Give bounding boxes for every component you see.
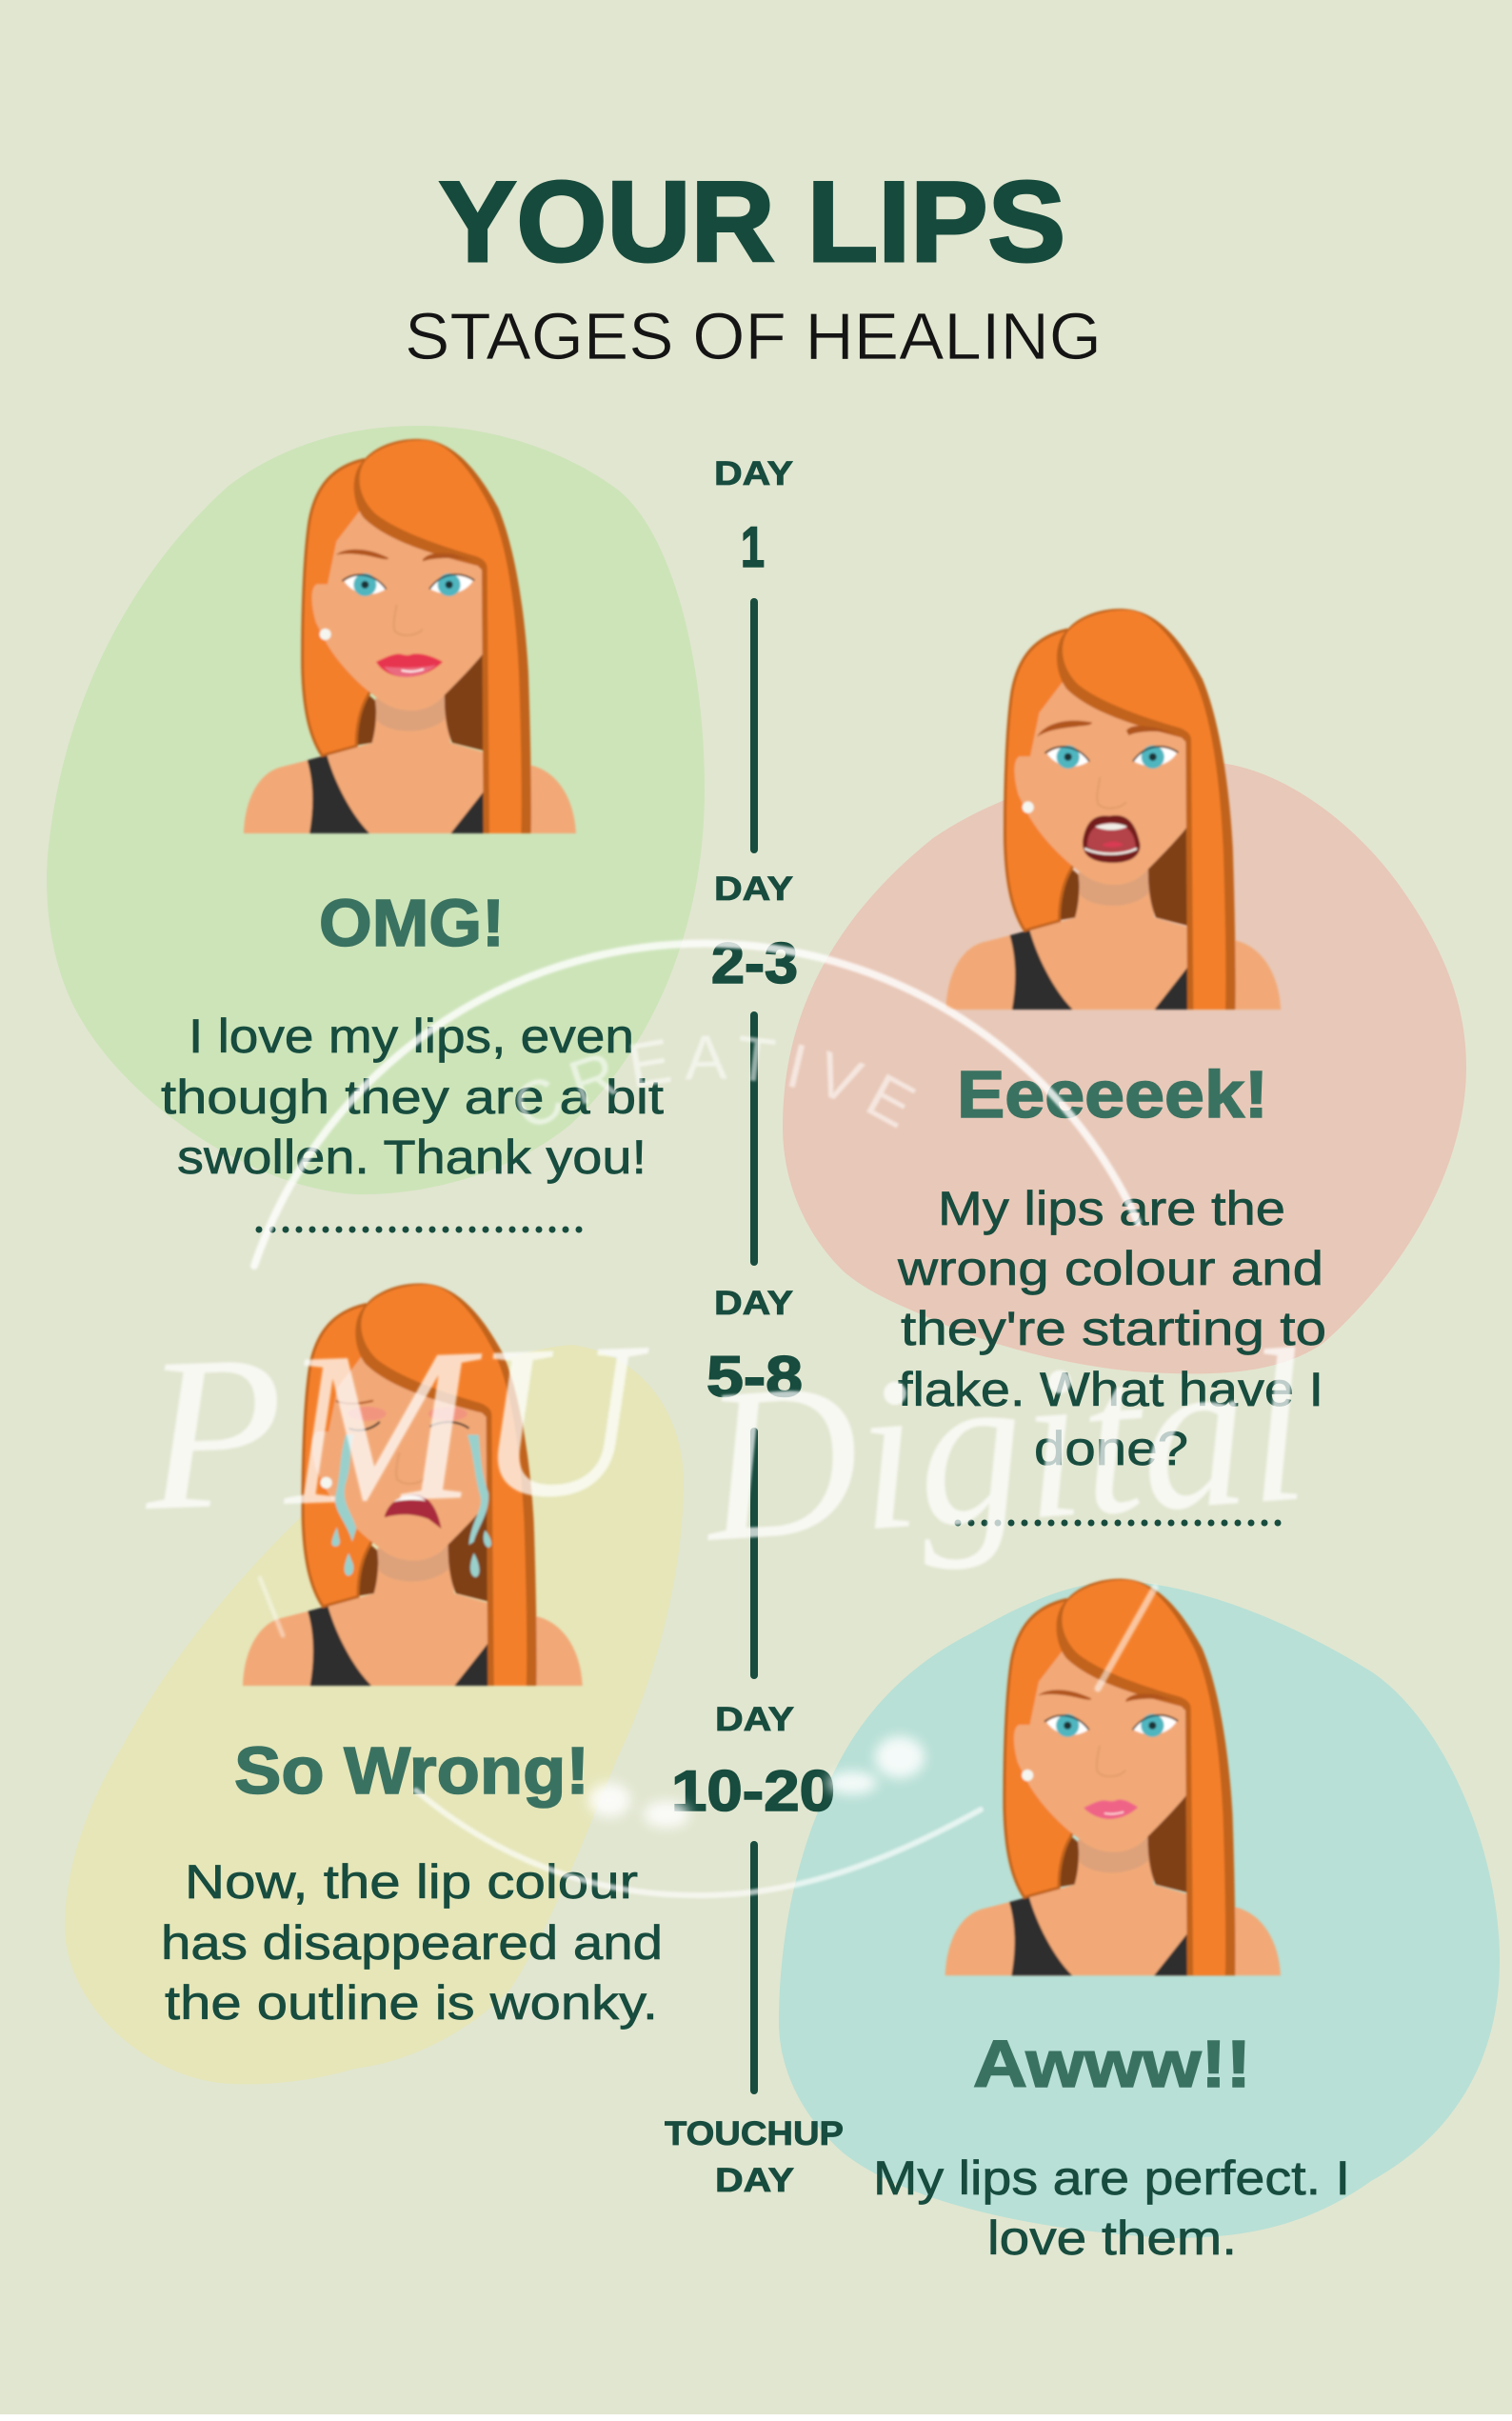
- blob: yellow: [65, 1345, 684, 2084]
- text block: Eeeeeek: [897, 1057, 1326, 1475]
- blob: teal: [779, 1581, 1500, 2238]
- dotted separator right: [958, 1520, 1281, 1526]
- heading: Awww: Awww!!: [973, 2027, 1251, 2101]
- body: OMG: swollen. Thank you!: [177, 1130, 647, 1184]
- timeline label: day 2-3: DAY: [714, 870, 793, 908]
- illustration: woman calm, day 1: [244, 439, 576, 833]
- timeline number: 10-20: 10-20: [671, 1759, 835, 1823]
- illustration: woman crying, day 5-8: [243, 1284, 583, 1686]
- body: So Wrong: has disappeared and: [161, 1916, 663, 1970]
- body: So Wrong: the outline is wonky.: [165, 1976, 658, 2030]
- text block: OMG: [161, 886, 664, 1184]
- body: So Wrong: [161, 1855, 663, 2030]
- timeline segment 4: [750, 1845, 758, 2091]
- body: OMG: though they are a bit: [161, 1070, 664, 1124]
- body: Eeeeeek: [897, 1182, 1326, 1475]
- body: Eeeeeek: done?: [1034, 1422, 1188, 1475]
- timeline number: 1: 1: [741, 515, 765, 579]
- timeline segment 2: [750, 1015, 758, 1262]
- body: Eeeeeek: flake. What have I: [898, 1363, 1323, 1416]
- timeline label: day 1: DAY: [714, 455, 793, 492]
- body: Awww: [873, 2151, 1350, 2265]
- timeline segment 3: [750, 1431, 758, 1675]
- body: Eeeeeek: My lips are the: [938, 1182, 1285, 1235]
- text block: Awww: [873, 2027, 1350, 2265]
- blob: pink: [783, 762, 1466, 1373]
- timeline: [665, 455, 844, 2199]
- timeline number: 2-3: 2-3: [711, 931, 798, 995]
- timeline segment 1: [750, 602, 758, 850]
- heading: Eeeeeek: Eeeeeek!: [957, 1057, 1268, 1131]
- watermark: [138, 939, 1314, 1899]
- body: OMG: [161, 1010, 664, 1184]
- body: Awww: love them.: [987, 2211, 1237, 2265]
- timeline label: day (touchup): DAY: [715, 2162, 794, 2199]
- subtitle: STAGES OF HEALING: [405, 299, 1102, 373]
- dotted separator left: [259, 1227, 582, 1232]
- heading: So Wrong: So Wrong!: [234, 1733, 589, 1808]
- body: Eeeeeek: they're starting to: [901, 1302, 1326, 1355]
- watermark: PMU: [138, 1296, 656, 1556]
- timeline label: day 10-20: DAY: [715, 1701, 794, 1738]
- illustration: woman happy, touchup day: [945, 1579, 1281, 1975]
- body: Eeeeeek: wrong colour and: [897, 1242, 1323, 1295]
- heading: OMG: OMG!: [319, 886, 505, 960]
- body: So Wrong: Now, the lip colour: [185, 1855, 638, 1909]
- body: Awww: My lips are perfect. I: [873, 2151, 1350, 2205]
- timeline label: day 5-8: DAY: [714, 1285, 793, 1322]
- watermark: CREATIVE: [516, 1035, 916, 1129]
- blob: green: [47, 426, 705, 1194]
- text block: So Wrong: [161, 1733, 663, 2030]
- timeline label: touchup day: TOUCHUP: [665, 2115, 844, 2152]
- illustration: woman shocked, day 2-3: [945, 609, 1281, 1010]
- title: YOUR LIPS: [439, 158, 1065, 286]
- timeline number: 5-8: 5-8: [706, 1345, 803, 1409]
- watermark: Digital: [694, 1303, 1314, 1588]
- body: OMG: I love my lips, even: [189, 1010, 634, 1063]
